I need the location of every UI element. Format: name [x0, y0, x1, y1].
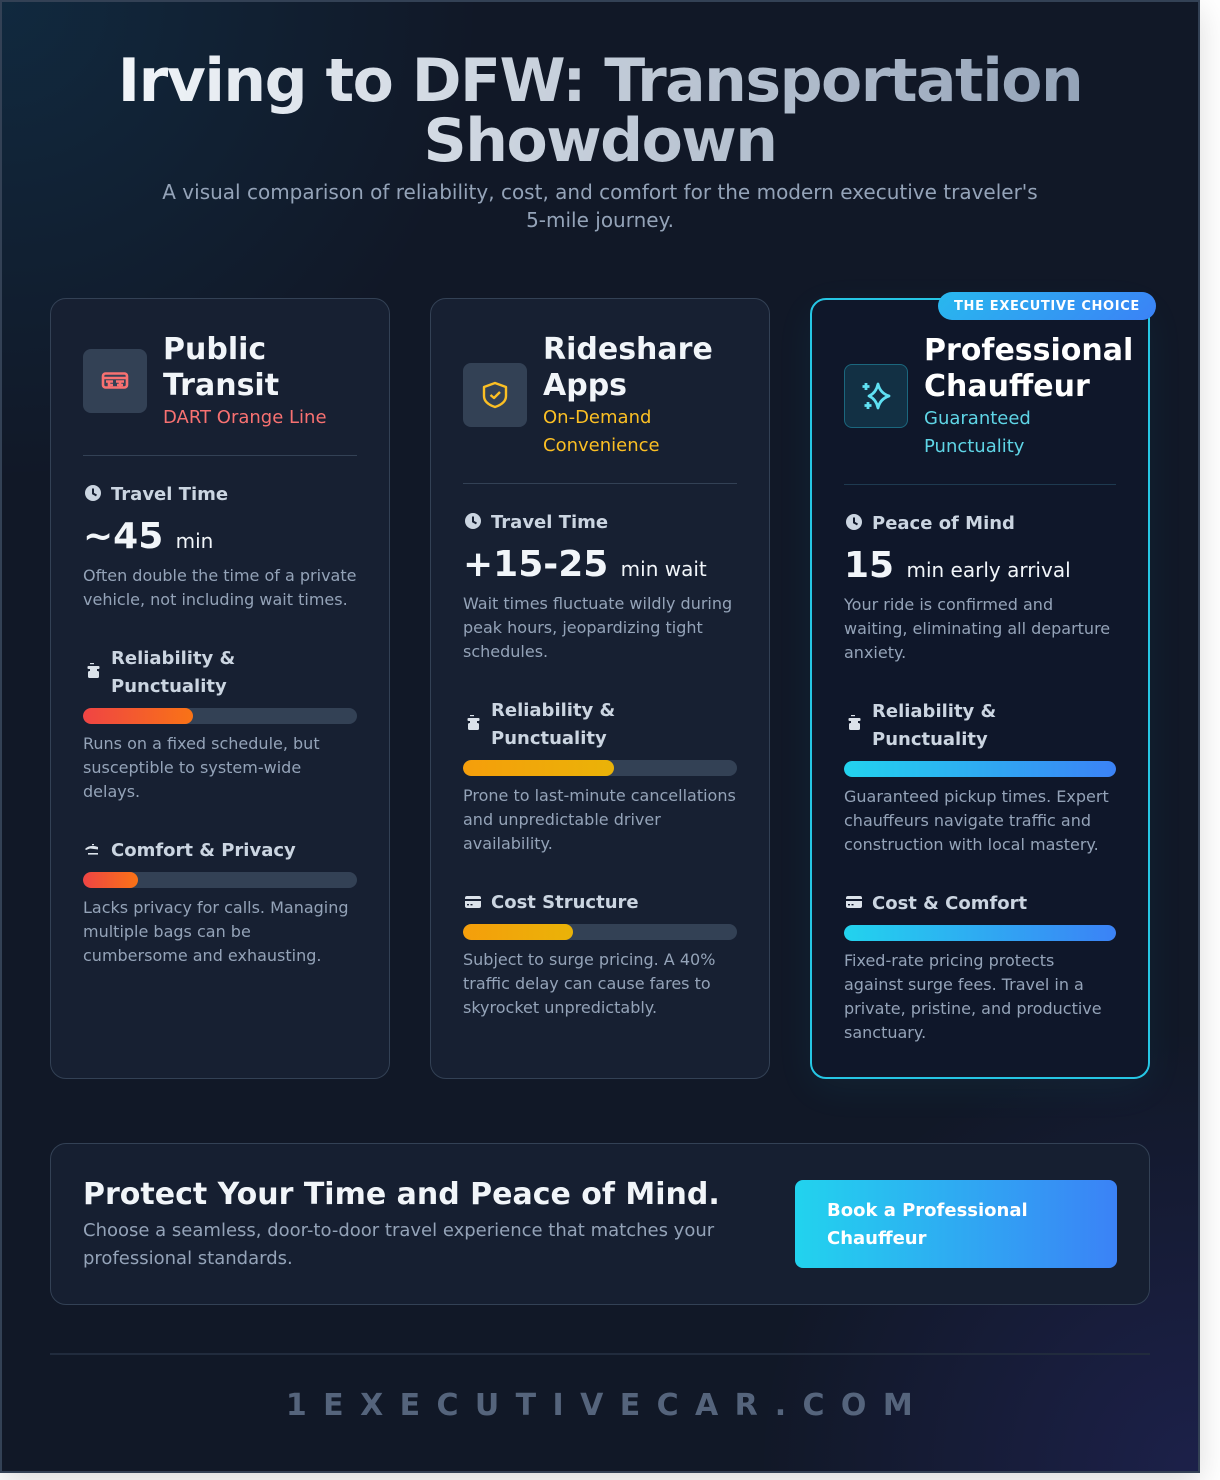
label: reliability: Punctuality	[491, 728, 607, 749]
icon: card	[846, 896, 862, 908]
description: Runs on a fixed schedule, but	[83, 734, 320, 753]
text	[83, 1220, 714, 1269]
label: reliability: Reliability &	[872, 701, 996, 722]
title: Irving to DFW: Transportation	[118, 46, 1082, 116]
label: cost: Cost Structure	[491, 892, 639, 913]
icon: shield	[463, 363, 527, 427]
heading	[924, 333, 1133, 404]
description: skyrocket unpredictably.	[463, 998, 657, 1017]
description: and unpredictable driver	[463, 810, 661, 829]
icon: ticket	[83, 349, 147, 413]
subheading: Punctuality	[924, 436, 1024, 457]
description	[83, 898, 349, 965]
badge: THE EXECUTIVE CHOICE	[954, 299, 1140, 314]
subheading	[543, 407, 660, 456]
description: Lacks privacy for calls. Managing	[83, 898, 349, 917]
value: +15-25 min wait	[463, 544, 707, 585]
subheading: Guaranteed	[924, 408, 1031, 429]
bar: cost	[463, 924, 737, 940]
description: Prone to last-minute cancellations	[463, 786, 736, 805]
label: reliability: Punctuality	[872, 729, 988, 750]
description	[844, 787, 1109, 854]
text: professional standards.	[83, 1248, 293, 1269]
heading	[543, 332, 713, 403]
bar: reliability	[83, 708, 357, 724]
description	[844, 595, 1110, 662]
heading: Chauffeur	[924, 369, 1090, 404]
subheading	[924, 408, 1031, 457]
description	[463, 950, 715, 1017]
heading: Apps	[543, 368, 627, 403]
footer brand: 1EXECUTIVECAR.COM	[286, 1388, 929, 1423]
description: anxiety.	[844, 643, 906, 662]
text: Choose a seamless, door-to-door travel experience that matches your	[83, 1220, 714, 1241]
description: availability.	[463, 834, 553, 853]
icon: comfort	[85, 844, 98, 855]
description	[463, 594, 732, 661]
label: reliability: Reliability &	[491, 700, 615, 721]
label: reliability	[491, 700, 615, 749]
description: delays.	[83, 782, 140, 801]
heading	[163, 332, 279, 403]
bar: cost and comfort	[844, 925, 1116, 941]
panel: professional chauffeur	[810, 298, 1150, 1079]
label: reliability	[872, 701, 996, 750]
heading: Transit	[163, 368, 279, 403]
description: chauffeurs navigate traffic and	[844, 811, 1091, 830]
title: Showdown	[424, 106, 776, 176]
heading: Protect Your Time and Peace of Mind.	[83, 1177, 720, 1212]
description: sanctuary.	[844, 1023, 926, 1042]
subheading: DART Orange Line	[163, 407, 327, 428]
description: Guaranteed pickup times. Expert	[844, 787, 1109, 806]
description	[83, 734, 320, 801]
panel: call to action	[50, 1143, 1150, 1305]
description: cumbersome and exhausting.	[83, 946, 321, 965]
description: against surge fees. Travel in a	[844, 975, 1084, 994]
description: Subject to surge pricing. A 40%	[463, 950, 715, 969]
button: Chauffeur	[827, 1228, 926, 1249]
description: vehicle, not including wait times.	[83, 590, 348, 609]
badge	[938, 292, 1156, 320]
description: construction with local mastery.	[844, 835, 1099, 854]
button	[795, 1180, 1117, 1268]
label: travel time: Travel Time	[491, 512, 608, 533]
description	[83, 566, 356, 609]
value: ~45 min	[83, 516, 213, 557]
description: private, pristine, and productive	[844, 999, 1102, 1018]
label: reliability	[111, 648, 235, 697]
button: Book a Professional	[827, 1200, 1028, 1221]
description: Your ride is confirmed and	[844, 595, 1053, 614]
icon: reliability	[848, 715, 860, 730]
label: cost and comfort: Cost & Comfort	[872, 893, 1027, 914]
panel: rideshare apps	[430, 298, 770, 1079]
subheading: On-Demand	[543, 407, 651, 428]
description	[844, 951, 1102, 1042]
panel: public transit	[50, 298, 390, 1079]
heading: Rideshare	[543, 332, 713, 367]
label: reliability: Punctuality	[111, 676, 227, 697]
icon: reliability	[468, 715, 480, 730]
description: Wait times fluctuate wildly during	[463, 594, 732, 613]
icon: clock	[465, 513, 481, 529]
label: travel time: Travel Time	[111, 484, 228, 505]
description: peak hours, jeopardizing tight	[463, 618, 703, 637]
value: 15 min early arrival	[844, 545, 1071, 586]
heading: Public	[163, 332, 266, 367]
icon: clock	[846, 514, 862, 530]
subheading: Convenience	[543, 435, 660, 456]
bar: reliability	[463, 760, 737, 776]
label: peace of mind: Peace of Mind	[872, 513, 1015, 534]
label: comfort: Comfort & Privacy	[111, 840, 296, 861]
description: traffic delay can cause fares to	[463, 974, 711, 993]
bar: comfort	[83, 872, 357, 888]
title	[118, 46, 1082, 176]
subtitle: 5-mile journey.	[526, 208, 674, 232]
subtitle: A visual comparison of reliability, cost, and comfort for the modern executive traveler's	[162, 180, 1038, 204]
subtitle	[162, 180, 1038, 232]
icon: reliability	[88, 663, 100, 678]
icon: clock	[85, 485, 101, 501]
description: multiple bags can be	[83, 922, 251, 941]
description: Fixed-rate pricing protects	[844, 951, 1054, 970]
icon: card	[465, 896, 481, 908]
bar: reliability	[844, 761, 1116, 777]
description: Often double the time of a private	[83, 566, 356, 585]
heading: Professional	[924, 333, 1133, 368]
description: susceptible to system-wide	[83, 758, 301, 777]
description	[463, 786, 736, 853]
icon: sparkle	[844, 364, 908, 428]
description: waiting, eliminating all departure	[844, 619, 1110, 638]
label: reliability: Reliability &	[111, 648, 235, 669]
description: schedules.	[463, 642, 548, 661]
